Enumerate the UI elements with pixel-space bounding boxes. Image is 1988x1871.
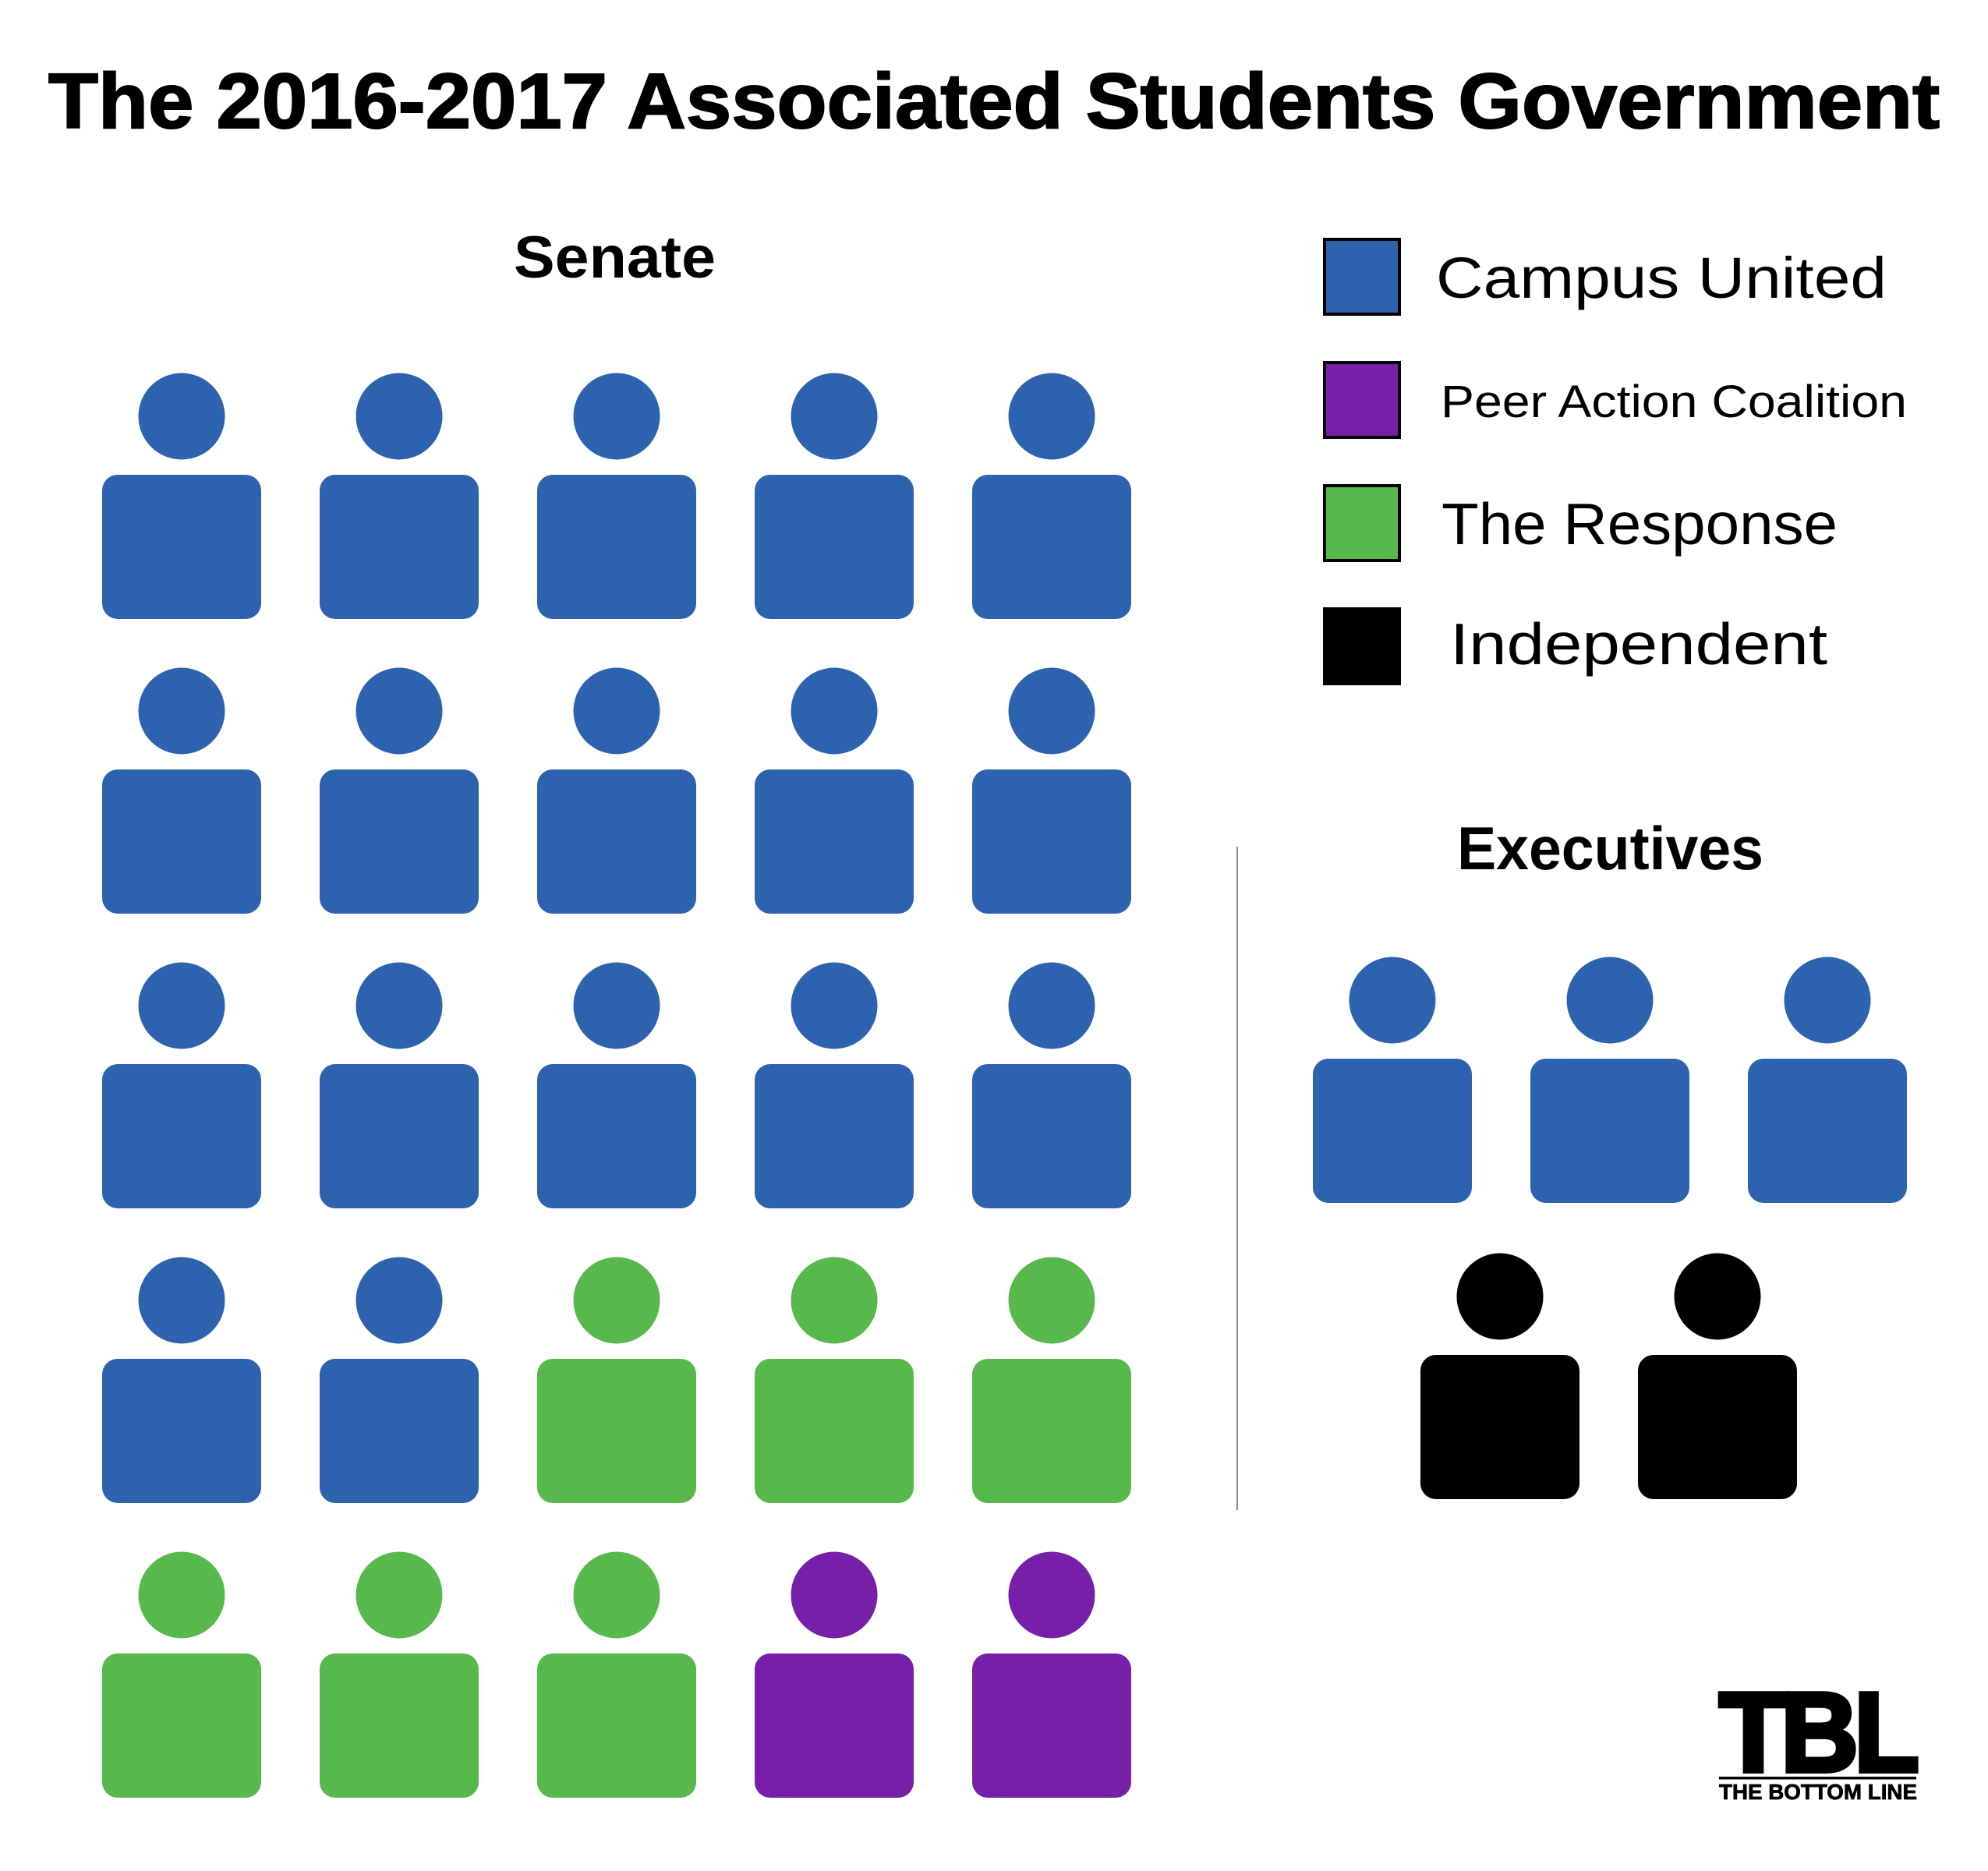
panel: executive seats xyxy=(1313,957,1907,1499)
logo rule xyxy=(1719,1777,1916,1779)
legend item: Campus United: Campus United xyxy=(1436,246,1887,310)
legend item: Independent xyxy=(1325,609,1827,684)
row 1: Campus United seats xyxy=(102,373,1131,619)
executives row 2: Independent xyxy=(1420,1254,1797,1499)
logo letters TBL: L xyxy=(1854,1669,1919,1795)
row 5: The Response and Peer Action Coalition seats xyxy=(102,1551,1131,1798)
logo wordmark: THE BOTTOM LINE xyxy=(1719,1780,1917,1804)
legend item: Peer Action Coalition xyxy=(1325,363,1907,437)
legend xyxy=(1325,239,1907,684)
title: The 2016-2017 Associated Students Government xyxy=(48,58,1940,145)
legend item: Peer Action Coalition: Peer Action Coalition xyxy=(1441,377,1907,427)
logo letters TBL: B xyxy=(1781,1669,1859,1795)
panel: senate seats xyxy=(102,373,1131,1798)
heading: Executives: Executives xyxy=(1457,814,1763,882)
divider between senate and executives xyxy=(1236,847,1238,1510)
row 4: Campus United and The Response seats xyxy=(102,1257,1131,1503)
heading: Senate: Senate xyxy=(514,225,716,291)
logo letters TBL xyxy=(1719,1669,1919,1795)
legend item: The Response xyxy=(1325,486,1838,561)
logo letters TBL: T xyxy=(1719,1669,1788,1795)
legend item: The Response: The Response xyxy=(1441,491,1838,557)
executives row 1: Campus United xyxy=(1313,957,1907,1203)
legend item: Independent: Independent xyxy=(1450,611,1827,677)
legend item: Campus United xyxy=(1325,239,1887,314)
row 3: Campus United seats xyxy=(102,962,1131,1208)
row 2: Campus United seats xyxy=(102,667,1131,914)
logo: The Bottom Line xyxy=(1719,1669,1919,1804)
